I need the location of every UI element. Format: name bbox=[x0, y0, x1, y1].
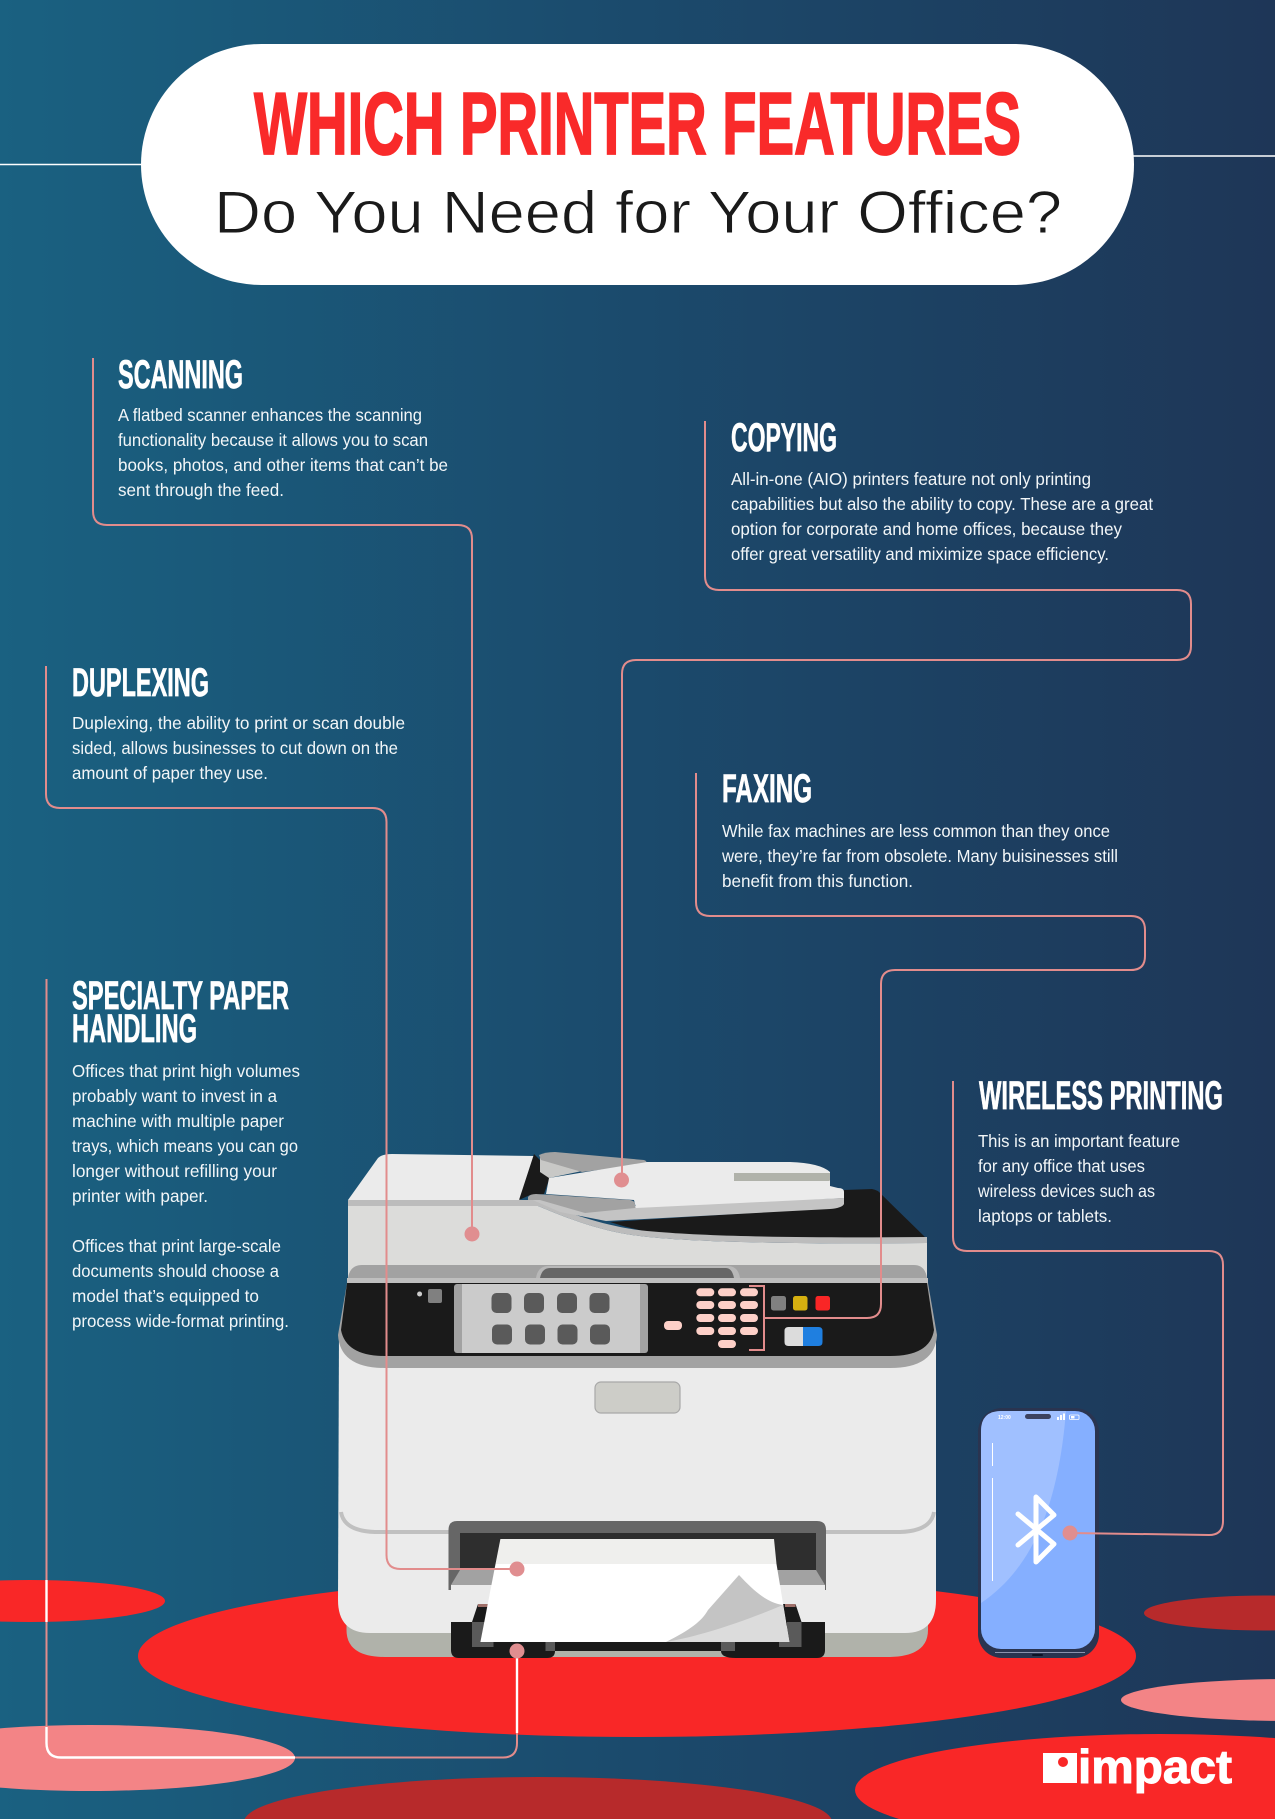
feature: wireless printing bbox=[977, 1074, 1223, 1226]
connector: scanning bbox=[93, 358, 472, 1234]
body: specialty paper handling: printer with paper. bbox=[72, 1186, 208, 1206]
heading: faxing: FAXING bbox=[722, 767, 812, 811]
body: wireless printing: This is an important feature bbox=[978, 1131, 1180, 1151]
phone notch bbox=[1025, 1414, 1051, 1419]
output tray bbox=[448, 1521, 826, 1658]
control panel shell bbox=[338, 1283, 937, 1368]
bluetooth icon bbox=[1018, 1497, 1054, 1562]
phone bottom edge bbox=[995, 1652, 1085, 1656]
body: copying: All-in-one (AIO) printers feature not only printing bbox=[731, 469, 1091, 489]
control panel face bbox=[341, 1283, 934, 1356]
panel indicator bbox=[417, 1289, 442, 1303]
body: duplexing: Duplexing, the ability to print or scan double bbox=[72, 713, 405, 733]
body: copying: capabilities but also the ability to copy. These are a great bbox=[731, 494, 1153, 514]
phone side bars bbox=[992, 1443, 994, 1581]
printer front body bbox=[338, 1330, 936, 1633]
logo: impact bbox=[1043, 1740, 1232, 1793]
body: copying bbox=[731, 469, 1153, 564]
phone clock: 12:00 bbox=[998, 1415, 1011, 1421]
feeder front flap bbox=[528, 1194, 635, 1213]
feeder tray bbox=[546, 1162, 844, 1208]
paper bbox=[480, 1539, 789, 1642]
scanner lid bbox=[348, 1154, 534, 1200]
document feeder hinge bbox=[519, 1154, 551, 1200]
panel centre notch bbox=[536, 1266, 740, 1278]
heading: specialty paper handling: SPECIALTY PAPER bbox=[72, 974, 289, 1018]
body: faxing: While fax machines are less common than they once bbox=[722, 821, 1110, 841]
connector: duplexing bbox=[46, 666, 517, 1569]
phone bbox=[978, 1408, 1099, 1658]
connector: specialty paper bbox=[46, 979, 517, 1758]
title pill bbox=[141, 44, 1134, 285]
feature: scanning bbox=[118, 353, 448, 500]
body: copying: option for corporate and home offices, because they bbox=[731, 519, 1122, 539]
phone screen highlight bbox=[981, 1411, 1066, 1603]
colour buttons bbox=[771, 1296, 830, 1346]
body: duplexing: amount of paper they use. bbox=[72, 763, 268, 783]
feeder slot bbox=[734, 1173, 830, 1181]
body: scanning: sent through the feed. bbox=[118, 480, 284, 500]
heading: specialty paper handling: HANDLING bbox=[72, 1007, 197, 1051]
body: specialty paper handling: probably want to invest in a bbox=[72, 1086, 277, 1106]
heading: copying: COPYING bbox=[731, 416, 837, 460]
body seam bbox=[341, 1512, 934, 1532]
heading: specialty paper handling bbox=[72, 974, 289, 1051]
connector highlight over ellipses bbox=[46, 1580, 517, 1758]
body: faxing bbox=[721, 821, 1118, 891]
body: specialty paper handling: trays, which means you can go bbox=[72, 1136, 298, 1156]
feature: faxing bbox=[721, 767, 1118, 891]
body: wireless printing: laptops or tablets. bbox=[978, 1206, 1112, 1226]
body: scanning: functionality because it allows you to scan bbox=[118, 430, 428, 450]
panel top band bbox=[348, 1265, 927, 1283]
body: duplexing: sided, allows businesses to cut down on the bbox=[72, 738, 398, 758]
body: faxing: were, they’re far from obsolete. Many buisinesses still bbox=[721, 846, 1118, 866]
body: wireless printing bbox=[977, 1131, 1180, 1226]
feeder tray underside bbox=[528, 1198, 844, 1221]
body: wireless printing: wireless devices such as bbox=[977, 1181, 1155, 1201]
printer bbox=[338, 1152, 937, 1658]
title divider lines bbox=[0, 156, 1275, 164]
feature: specialty paper handling bbox=[72, 974, 300, 1331]
connector: faxing bbox=[696, 773, 1145, 1318]
scanner glass bbox=[610, 1189, 926, 1238]
body: copying: offer great versatility and miximize space efficiency. bbox=[731, 544, 1109, 564]
body: specialty paper handling: Offices that print high volumes bbox=[72, 1061, 300, 1081]
body: specialty paper handling: Offices that print large-scale bbox=[72, 1236, 281, 1256]
connector dots bbox=[464, 1172, 1078, 1658]
keypad bbox=[664, 1288, 758, 1348]
feature: copying bbox=[731, 416, 1153, 564]
heading: duplexing: DUPLEXING bbox=[72, 661, 209, 705]
body: specialty paper handling: machine with multiple paper bbox=[72, 1111, 284, 1131]
scanner lid edge bbox=[348, 1200, 927, 1243]
body: specialty paper handling bbox=[72, 1061, 300, 1331]
connector: wireless bbox=[953, 1081, 1223, 1535]
phone status icons bbox=[1057, 1414, 1079, 1420]
body: specialty paper handling: process wide-format printing. bbox=[72, 1311, 289, 1331]
panel screen bbox=[454, 1284, 648, 1353]
body: specialty paper handling: documents should choose a bbox=[72, 1261, 279, 1281]
feeder inner shadow bbox=[540, 1158, 582, 1178]
scanner front bbox=[348, 1206, 927, 1285]
body: duplexing bbox=[72, 713, 405, 783]
body: wireless printing: for any office that uses bbox=[978, 1156, 1145, 1176]
body: specialty paper handling: longer without refilling your bbox=[72, 1161, 277, 1181]
body: scanning: A flatbed scanner enhances the scanning bbox=[118, 405, 422, 425]
floor ellipses bbox=[0, 1575, 1275, 1819]
feature: duplexing bbox=[72, 661, 405, 783]
connector: copying bbox=[622, 421, 1191, 1180]
paper door handle bbox=[595, 1382, 680, 1413]
body: specialty paper handling: model that’s equipped to bbox=[72, 1286, 259, 1306]
body: scanning: books, photos, and other items that can’t be bbox=[118, 455, 448, 475]
printer feet bbox=[346, 1600, 928, 1657]
keypad bracket bbox=[749, 1286, 764, 1350]
feeder rear flap bbox=[539, 1152, 647, 1172]
logo mark bbox=[1043, 1753, 1077, 1783]
heading: scanning: SCANNING bbox=[118, 353, 243, 397]
body: faxing: benefit from this function. bbox=[722, 871, 913, 891]
logo wordmark: impact bbox=[1078, 1740, 1232, 1793]
title line 2: Do You Need for Your Office? bbox=[214, 179, 1062, 246]
body: scanning bbox=[118, 405, 448, 500]
